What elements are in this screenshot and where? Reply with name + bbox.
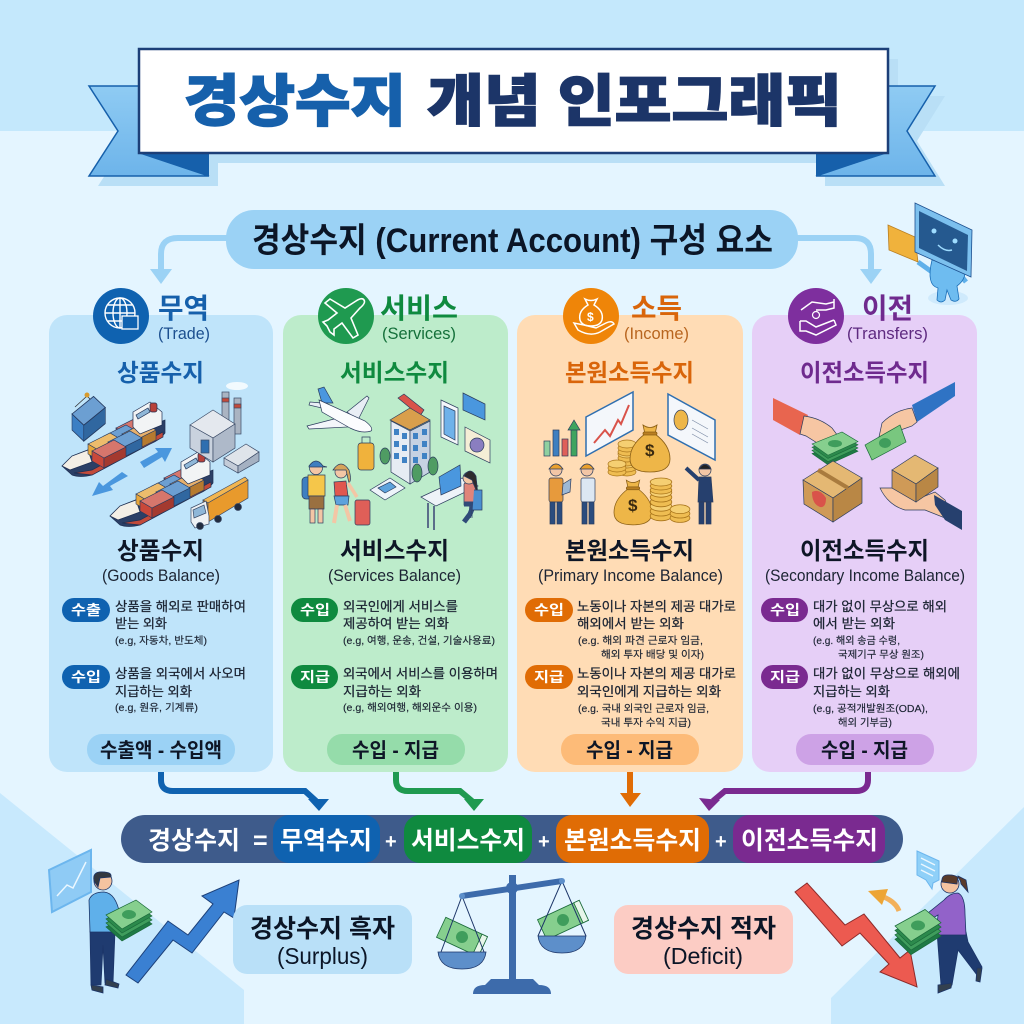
callout: surplus — [233, 905, 412, 974]
callout: surplus: (Surplus) — [277, 943, 368, 969]
formula: receipts minus payments — [327, 734, 465, 765]
plus sign: + — [715, 831, 727, 853]
chart: falling arrow — [795, 883, 917, 987]
icon: robot mascot — [888, 203, 972, 305]
text: payments description: 외국인에게 지급하는 외화 — [577, 684, 721, 699]
arrow: services to equation — [396, 772, 484, 811]
illustration: investment and wages: $ — [645, 441, 655, 460]
subheading: trade english: (Trade) — [158, 324, 210, 343]
arrow: trade to equation — [161, 772, 329, 811]
illustration: ships, factory, truck — [62, 382, 259, 530]
arrow: money outflow — [868, 889, 899, 911]
heading: services: 서비스 — [380, 293, 458, 324]
illustration: investment and wages — [544, 392, 715, 525]
title ribbon — [89, 49, 945, 186]
arrow: income to equation — [620, 772, 641, 807]
callout: deficit: (Deficit) — [663, 943, 743, 969]
english: goods balance: (Goods Balance) — [102, 566, 220, 585]
text: export description: (e.g, 자동차, 반도체) — [115, 635, 207, 647]
chart: rising arrow — [126, 880, 239, 983]
heading: services balance coloured: 서비스수지 — [340, 360, 449, 387]
text: receipts description: 외국인에게 서비스를 — [343, 599, 458, 614]
illustration: balance scale — [437, 875, 588, 994]
formula: exports minus imports: 수출액 - 수입액 — [100, 739, 222, 762]
text: receipts description — [813, 599, 947, 661]
icon: money bag on hand: $ — [587, 310, 594, 324]
subheading: services english: (Services) — [382, 324, 456, 343]
badge: receipts: 수입 — [300, 602, 330, 618]
heading: goods balance coloured: 상품수지 — [117, 360, 204, 387]
equation term: transfers — [733, 815, 885, 863]
panel: trade — [49, 288, 273, 772]
text: receipts description: 해외 투자 배당 및 이자) — [601, 648, 704, 661]
equation: current account: 경상수지 — [148, 827, 240, 855]
arrow: transfers to equation — [699, 772, 868, 811]
badge: receipts — [525, 598, 573, 622]
callout: deficit: 경상수지 적자 — [631, 915, 776, 943]
formula: receipts minus payments: 수입 - 지급 — [352, 739, 439, 762]
text: receipts description: 해외에서 받는 외화 — [577, 616, 684, 631]
text: receipts description: 제공하여 받는 외화 — [343, 616, 449, 631]
heading: primary income coloured: 본원소득수지 — [565, 360, 694, 387]
heading: secondary income balance: 이전소득수지 — [800, 538, 929, 565]
badge: receipts: 수입 — [534, 602, 564, 618]
text: receipts description — [577, 599, 736, 661]
icon: giving hands — [788, 288, 844, 344]
plus sign: + — [538, 831, 550, 853]
text: payments description: 노동이나 자본의 제공 대가로 — [577, 666, 736, 681]
text: payments description: (e.g, 공적개발원조(ODA), — [813, 703, 928, 715]
callout: deficit — [614, 905, 793, 974]
badge: payments — [291, 665, 338, 689]
icon: airplane — [318, 288, 374, 344]
equation term: services — [404, 815, 532, 863]
text: payments description: 지급하는 외화 — [343, 684, 421, 699]
heading: primary income balance: 본원소득수지 — [565, 538, 694, 565]
badge: export — [62, 598, 110, 622]
badge: receipts — [291, 598, 338, 622]
badge: payments — [525, 665, 573, 689]
subtitle pill — [226, 210, 798, 269]
icon: money bag on hand — [563, 288, 619, 344]
text: receipts description: (e.g. 해외 파견 근로자 임금, — [578, 634, 703, 647]
badge: receipts — [761, 598, 808, 622]
text: payments description: 지급하는 외화 — [813, 684, 890, 699]
text: export description: 상품을 해외로 판매하여 — [115, 599, 246, 614]
text: export description: 받는 외화 — [115, 616, 167, 631]
equation term: income — [556, 815, 709, 863]
text: receipts description: 대가 없이 무상으로 해외 — [813, 599, 947, 614]
equation term: transfers: 이전소득수지 — [741, 827, 878, 855]
text: import description: 지급하는 외화 — [115, 684, 192, 699]
text: payments description — [343, 666, 498, 714]
title text: 경상수지 — [184, 70, 406, 133]
illustration: woman with money — [895, 875, 982, 993]
icon: globe and container — [93, 288, 149, 344]
formula: receipts minus payments: 수입 - 지급 — [821, 739, 908, 762]
formula: receipts minus payments — [796, 734, 934, 765]
english: secondary income balance: (Secondary Income Balance) — [765, 566, 965, 585]
equation term: trade: 무역수지 — [280, 827, 372, 855]
heading: transfers: 이전 — [862, 293, 913, 324]
equation term: services: 서비스수지 — [411, 827, 525, 855]
text: payments description: (e.g, 해외여행, 해외운수 이용) — [343, 701, 477, 714]
formula: receipts minus payments — [561, 734, 699, 765]
heading: services balance: 서비스수지 — [340, 538, 449, 565]
badge: payments: 지급 — [300, 669, 330, 685]
connector arrow: left — [150, 238, 230, 284]
badge: export: 수출 — [71, 602, 101, 618]
illustration: investment and wages: $ — [628, 496, 638, 515]
badge: receipts: 수입 — [770, 602, 800, 618]
text: payments description: 국내 투자 수익 지급) — [601, 717, 691, 729]
heading: secondary income coloured: 이전소득수지 — [800, 360, 929, 387]
subheading: transfers english: (Transfers) — [847, 324, 928, 343]
subtitle pill: 경상수지 (Current Account) 구성 요소 — [252, 222, 773, 260]
text: receipts description: (e.g, 여행, 운송, 건설, 기술사용료) — [343, 635, 495, 647]
badge: payments: 지급 — [534, 669, 564, 685]
text: payments description: (e.g. 국내 외국인 근로자 임금, — [578, 702, 709, 715]
english: services balance: (Services Balance) — [328, 566, 461, 585]
text: import description: 상품을 외국에서 사오며 — [115, 666, 246, 681]
panel: transfers — [752, 288, 977, 772]
title text second part: 개념 인포그래픽 — [427, 70, 842, 133]
text: payments description: 대가 없이 무상으로 해외에 — [813, 666, 960, 681]
icon: chart screen — [49, 850, 91, 912]
panel: services — [283, 288, 508, 772]
illustration: travel, hotel, remote work — [302, 387, 490, 530]
heading: trade: 무역 — [158, 293, 209, 324]
heading: income: 소득 — [631, 293, 682, 324]
text: receipts description — [343, 599, 495, 647]
formula: receipts minus payments: 수입 - 지급 — [586, 739, 673, 762]
subheading: income english: (Income) — [624, 324, 689, 343]
badge: import — [62, 665, 110, 689]
badge: import: 수입 — [71, 669, 101, 685]
text: receipts description: (e.g. 해외 송금 수령, — [813, 634, 900, 647]
connector arrow: right — [794, 238, 882, 284]
equation term: income: 본원소득수지 — [564, 827, 701, 855]
callout: surplus: 경상수지 흑자 — [250, 915, 395, 943]
text: payments description — [577, 666, 736, 729]
icon: speech bubble — [917, 851, 939, 889]
text: import description: (e.g, 원유, 기계류) — [115, 702, 198, 714]
illustration: man with money — [89, 872, 152, 993]
formula: exports minus imports — [87, 734, 235, 765]
text: payments description: 해외 기부금) — [838, 716, 892, 729]
text: payments description — [813, 666, 960, 729]
panel: income — [517, 288, 743, 772]
illustration: remittances and aid boxes — [773, 382, 962, 530]
equation bar — [121, 815, 903, 863]
badge: payments — [761, 665, 808, 689]
plus sign: + — [385, 831, 397, 853]
heading: goods balance: 상품수지 — [117, 538, 204, 565]
text: receipts description: 국제기구 무상 원조) — [838, 649, 924, 661]
badge: payments: 지급 — [770, 669, 800, 685]
equation term: trade — [273, 815, 380, 863]
text: export description — [115, 599, 246, 647]
text: import description — [115, 666, 246, 714]
text: receipts description: 노동이나 자본의 제공 대가로 — [577, 599, 736, 614]
text: receipts description: 에서 받는 외화 — [813, 616, 895, 631]
text: payments description: 외국에서 서비스를 이용하며 — [343, 666, 498, 681]
equals sign: = — [253, 827, 268, 855]
english: primary income balance: (Primary Income Balance) — [538, 566, 723, 585]
